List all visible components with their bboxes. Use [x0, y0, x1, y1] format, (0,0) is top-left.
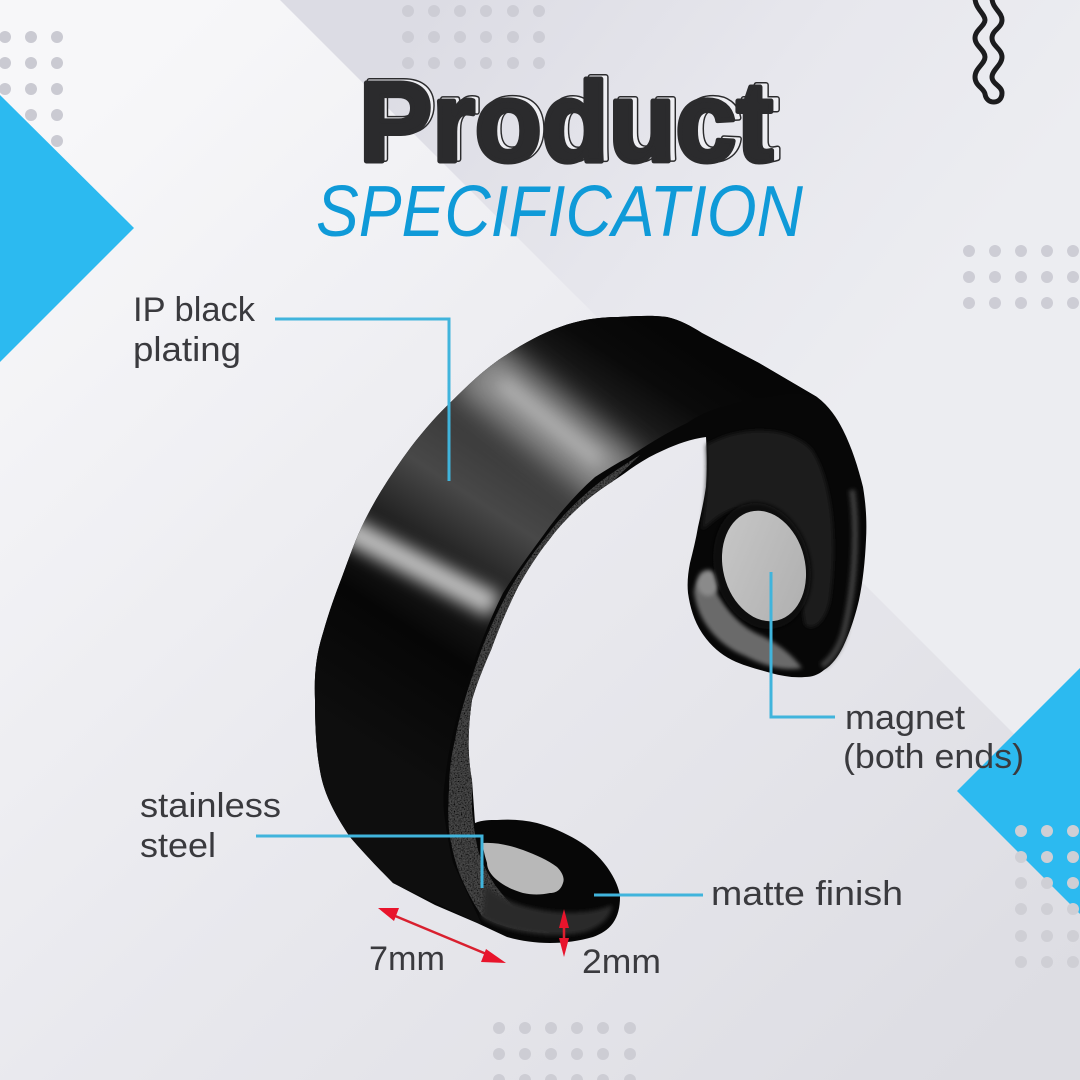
- dimension arrow: 7mm: [378, 908, 506, 963]
- callout line: magnet: [771, 572, 835, 717]
- label: IP black plating: plating: [133, 331, 241, 369]
- ring inner surface: [702, 431, 833, 627]
- top end: bright spot: [697, 570, 719, 596]
- callout line: stainless steel: [256, 836, 482, 888]
- top end: worn tip: [694, 580, 802, 669]
- upper highlight: [470, 362, 625, 485]
- label: magnet (both ends): magnet: [845, 699, 966, 737]
- subtitle: SPECIFICATION: SPECIFICATION: [316, 172, 804, 252]
- dot grid: bottom right: [1015, 825, 1079, 968]
- callout line: matte finish: [594, 894, 703, 896]
- bottom end: worn tip: [482, 885, 612, 935]
- upper highlight core: [500, 382, 600, 462]
- dot grid: top centre: [402, 5, 545, 69]
- band base shading: [314, 316, 817, 885]
- label: IP black plating: IP black: [133, 291, 256, 329]
- label: stainless steel: stainless: [140, 787, 281, 825]
- ring speckled rim: [448, 455, 640, 933]
- ring outer edge sheen: [822, 490, 855, 666]
- label: 2mm: 2mm: [582, 943, 661, 981]
- label: magnet (both ends): [843, 699, 1024, 776]
- lower highlight: [345, 528, 495, 606]
- ring front band with highlights: [314, 316, 817, 885]
- blue triangle: left: [0, 95, 134, 362]
- label: stainless steel: [140, 787, 281, 865]
- dimension arrow: 2mm: [559, 909, 569, 957]
- callout line: IP black plating: [275, 319, 449, 481]
- label: 7mm: 7mm: [369, 940, 445, 978]
- top end: magnet: [711, 502, 817, 630]
- icon: squiggle: [975, 0, 1002, 102]
- ring: black open band: [300, 300, 866, 943]
- bottom end: magnet: [483, 843, 564, 894]
- dot grid: right: [963, 245, 1079, 309]
- label: stainless steel: steel: [140, 827, 216, 865]
- dot grid: bottom centre: [493, 1022, 636, 1080]
- label: magnet (both ends): (both ends): [843, 738, 1024, 776]
- ring silhouette: [315, 316, 866, 943]
- blue triangle: right: [957, 668, 1080, 914]
- title: Product: Product: [362, 57, 779, 183]
- dot grid: top left: [0, 31, 63, 147]
- title: Product: Product: [362, 57, 779, 183]
- label: IP black plating: [133, 291, 256, 369]
- label: matte finish: matte finish: [711, 875, 903, 913]
- top end: dark halo around magnet: [700, 492, 824, 640]
- title: Product: Product: [359, 59, 773, 185]
